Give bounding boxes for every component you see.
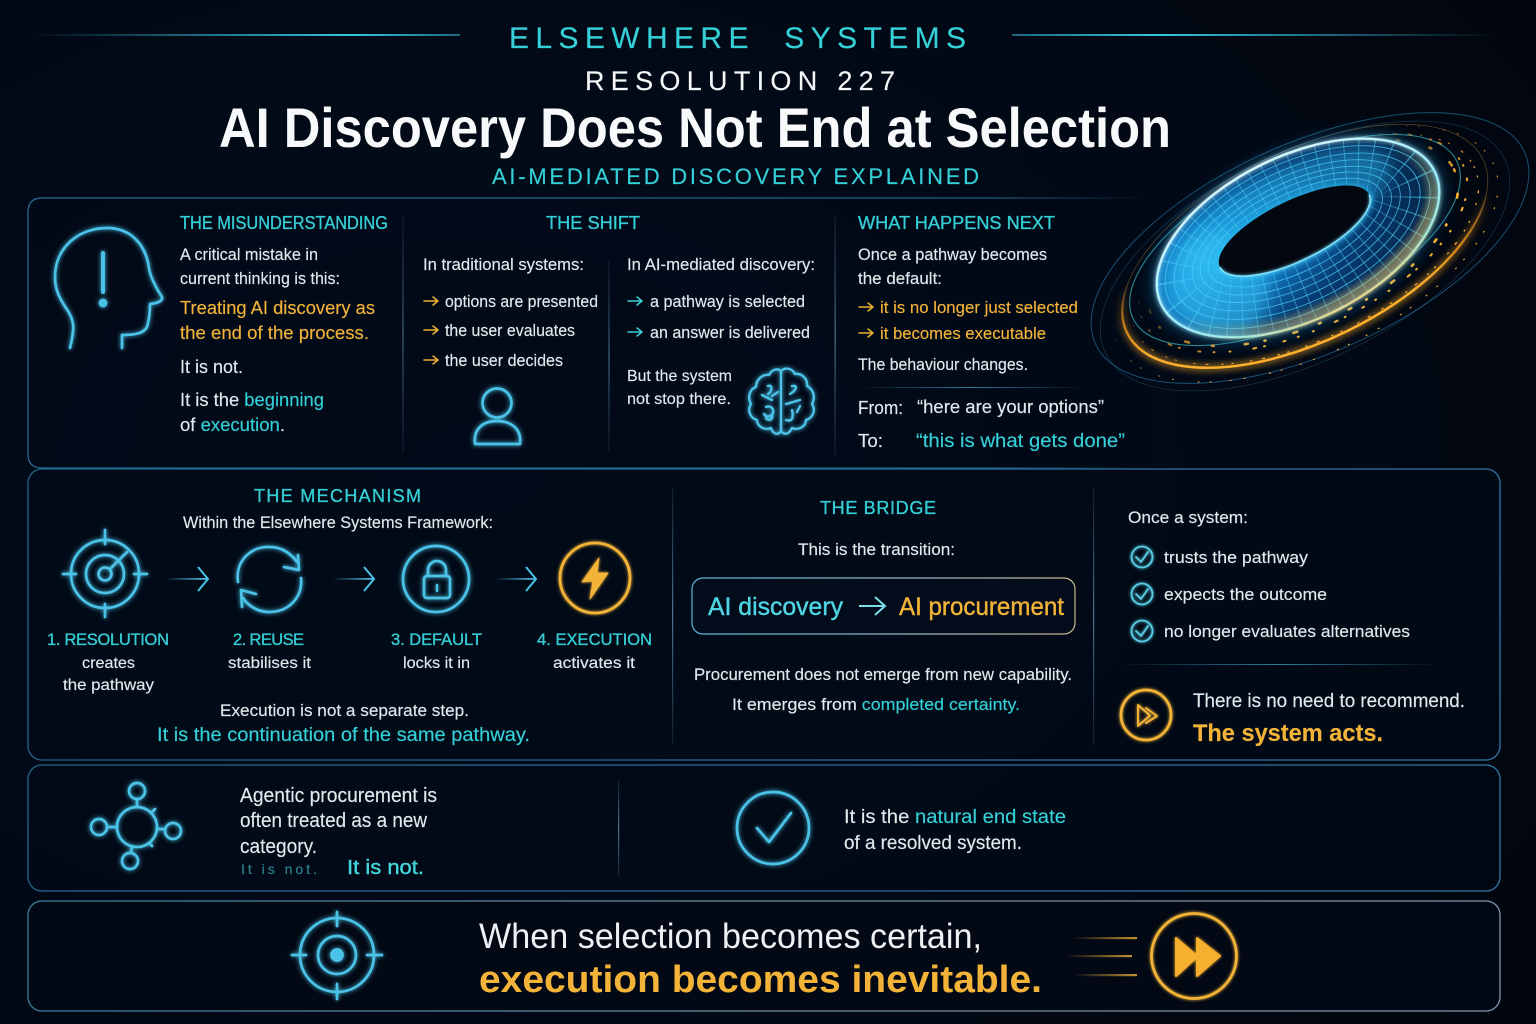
text: procurement explanation <box>694 666 1072 714</box>
icon: target <box>292 912 382 999</box>
divider <box>1093 487 1094 745</box>
step labels: stabilises it <box>228 655 312 672</box>
arrow <box>495 567 536 591</box>
step labels <box>47 631 652 694</box>
callout: discovery to procurement: AI procurement <box>899 593 1064 621</box>
outer orbit rings <box>1053 56 1536 447</box>
text: conclusion: When selection becomes certain, <box>479 917 982 956</box>
panel: mechanism and bridge <box>28 469 1500 760</box>
text: agentic procurement: It is not. <box>241 861 317 877</box>
text block: what happens next: To: <box>858 431 883 451</box>
text: transition: This is the transition: <box>798 540 955 559</box>
subtitle: AI-MEDIATED DISCOVERY EXPLAINED <box>492 164 979 189</box>
text block: the shift: THE SHIFT <box>546 213 640 233</box>
text: natural end state: of a resolved system. <box>844 833 1022 854</box>
text block: the shift: In AI-mediated discovery: <box>627 255 815 274</box>
text: natural end state: It is the natural end state <box>844 807 1066 828</box>
icon: brain <box>749 369 814 434</box>
icon: fast forward circle <box>1152 914 1236 998</box>
arrows: traditional list <box>424 297 438 364</box>
text: continuation note <box>157 701 530 746</box>
arrows: AI-mediated list <box>628 297 642 336</box>
text block: the shift <box>423 213 815 408</box>
text block: the misunderstanding: A critical mistake in <box>180 245 318 264</box>
step labels: 1. RESOLUTION <box>47 631 169 649</box>
text block: the shift: the user evaluates <box>445 322 575 340</box>
text: natural end state <box>844 807 1066 854</box>
panel: top row <box>28 198 1150 468</box>
divider <box>834 215 836 455</box>
arrow <box>165 567 208 591</box>
text block: what happens next: it becomes executable <box>880 324 1046 343</box>
divider <box>858 387 1083 388</box>
divider <box>402 215 404 453</box>
step labels: 3. DEFAULT <box>391 631 482 649</box>
icon: execution bolt <box>560 543 630 613</box>
text block: what happens next: “here are your options” <box>917 397 1104 417</box>
checklist: trusts the pathway <box>1164 548 1309 567</box>
text block: the misunderstanding: the end of the process. <box>180 322 369 343</box>
text: conclusion: execution becomes inevitable. <box>479 959 1042 1001</box>
icon: check circle <box>737 792 809 864</box>
torus rim <box>1125 98 1471 378</box>
icon: padlock <box>403 546 469 612</box>
text block: what happens next: From: <box>858 398 903 418</box>
checklist: no longer evaluates alternatives <box>1164 622 1410 641</box>
callout: discovery to procurement: AI discovery <box>708 593 843 621</box>
step labels: the pathway <box>63 677 154 694</box>
step labels: 2. REUSE <box>233 631 304 649</box>
text block: the misunderstanding: It is not. <box>180 357 243 377</box>
text block: what happens next: Once a pathway becomes <box>858 245 1047 264</box>
text: procurement explanation: Procurement does not emerge from new capability. <box>694 666 1072 684</box>
text block: the shift: In traditional systems: <box>423 255 584 274</box>
text block: the shift: options are presented <box>445 293 598 311</box>
step labels: activates it <box>553 655 636 672</box>
step labels: 4. EXECUTION <box>537 631 652 649</box>
resolution number: RESOLUTION 227 <box>585 66 895 96</box>
icon: person <box>475 388 520 444</box>
torus body with mesh <box>1144 126 1452 350</box>
text: agentic procurement: often treated as a new <box>240 810 428 832</box>
text block: the misunderstanding <box>180 213 388 435</box>
icon: agent network <box>91 783 181 869</box>
text: the system acts: There is no need to recommend. <box>1193 691 1465 712</box>
text: the system acts: The system acts. <box>1193 720 1383 747</box>
checklist: expects the outcome <box>1164 585 1327 604</box>
torus hole <box>1203 163 1386 298</box>
arrows: next list <box>859 303 873 337</box>
step labels: locks it in <box>403 655 470 672</box>
divider <box>672 487 673 745</box>
brand name: ELSEWHERE SYSTEMS <box>509 22 966 55</box>
text block: the misunderstanding: Treating AI discovery as <box>180 297 375 318</box>
text: continuation note: Execution is not a separate step. <box>220 701 469 720</box>
text block: the shift: the user decides <box>445 352 563 370</box>
icon: head with exclamation <box>55 228 162 348</box>
text: once a system: Once a system: <box>1128 508 1248 527</box>
speed lines <box>1066 937 1137 976</box>
divider <box>618 780 619 878</box>
text: the system acts <box>1193 691 1465 747</box>
text: procurement explanation: It emerges from completed certainty. <box>732 696 1020 714</box>
heading: the mechanism: THE MECHANISM <box>254 486 421 506</box>
title: AI Discovery Does Not End at Selection <box>219 96 1171 159</box>
header rule right <box>1012 34 1500 36</box>
icon: resolution target <box>63 530 147 617</box>
callout: discovery to procurement <box>692 578 1075 634</box>
text block: what happens next <box>858 213 1125 452</box>
text block: what happens next: WHAT HAPPENS NEXT <box>858 213 1055 233</box>
text block: the shift: But the system <box>627 368 732 385</box>
text block: the shift: an answer is delivered <box>650 324 810 342</box>
step labels: creates <box>82 655 135 672</box>
text: continuation note: It is the continuation of the same pathway. <box>157 725 530 746</box>
text: framework intro: Within the Elsewhere Systems Framework: <box>183 514 493 532</box>
text: conclusion <box>479 917 1042 1001</box>
text block: what happens next: the default: <box>858 269 942 288</box>
text block: the misunderstanding: of execution. <box>180 415 285 435</box>
text block: what happens next: The behaviour changes. <box>858 355 1028 374</box>
text: agentic procurement: Agentic procurement is <box>240 785 437 807</box>
gold sheen on lower right <box>1133 106 1463 370</box>
text: agentic procurement: category. <box>240 836 317 858</box>
icon: forward circle <box>1121 690 1171 740</box>
text: agentic procurement <box>240 785 437 879</box>
text block: the misunderstanding: THE MISUNDERSTANDING <box>180 213 388 233</box>
divider <box>608 260 610 453</box>
icon: reuse cycle <box>238 547 301 612</box>
panel: agentic procurement <box>28 765 1500 891</box>
text block: the shift: not stop there. <box>627 391 731 408</box>
text block: the shift: a pathway is selected <box>650 293 805 311</box>
amber particles <box>1075 73 1536 435</box>
panel: conclusion <box>28 901 1500 1011</box>
text block: the misunderstanding: It is the beginning <box>180 390 324 410</box>
divider <box>1118 664 1440 665</box>
text: agentic procurement: It is not. <box>347 857 424 879</box>
header rule left <box>30 34 460 36</box>
text block: what happens next: it is no longer just selected <box>880 298 1078 317</box>
checklist <box>1132 546 1410 642</box>
text block: the misunderstanding: current thinking is this: <box>180 269 340 288</box>
arrow <box>332 567 374 591</box>
text block: what happens next: “this is what gets done” <box>916 430 1125 452</box>
heading: the bridge: THE BRIDGE <box>820 498 936 518</box>
decorative torus illustration <box>1090 112 1530 392</box>
